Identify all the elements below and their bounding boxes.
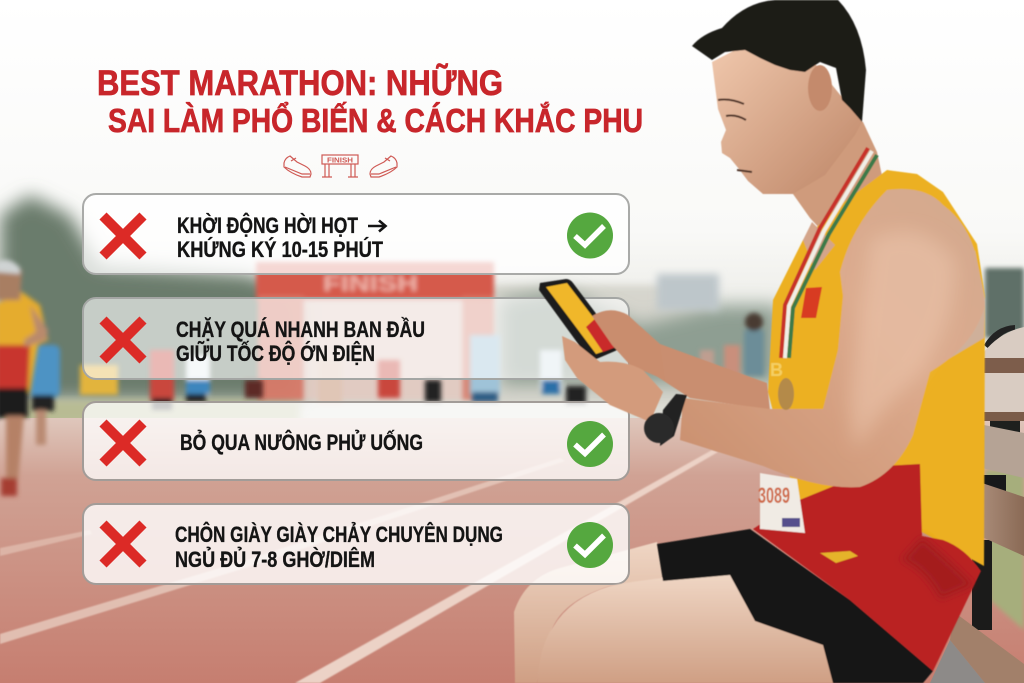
panel: hydration <box>83 402 629 480</box>
panel text: KHỜI ĐỘNG HỜI HỌT <box>177 213 358 238</box>
medal <box>778 378 794 410</box>
panel text: NGỦ ĐỦ 7-8 GHỜ/DIÊM <box>175 547 375 572</box>
runner seated on bench <box>537 0 985 683</box>
jersey chest lettering: B <box>770 360 783 380</box>
bib number <box>758 473 805 533</box>
panel: warm up <box>83 194 629 274</box>
icon: green check <box>567 522 613 568</box>
phone <box>539 279 622 360</box>
panel text: CHÔN GIÀY GIÀY CHẢY CHUYÊN DỤNG <box>175 522 503 547</box>
panel text <box>176 317 425 366</box>
tank top: red hem <box>753 464 981 671</box>
icon: green check <box>567 421 613 467</box>
hands <box>562 310 665 422</box>
shoulder and upper arm <box>680 189 985 487</box>
icon: left shoe <box>284 156 311 177</box>
medal ribbon <box>781 148 877 358</box>
smart watch <box>644 394 687 446</box>
icon: vietnam flag on jersey <box>801 287 822 318</box>
icon: green check <box>567 212 613 258</box>
background: foreground runner at left <box>0 260 48 496</box>
panel text: KHỨNG KÝ 10-15 PHÚT <box>177 237 383 262</box>
panel text: GIỮU TỐC ĐỘ ỚN ĐIỆN <box>176 340 375 366</box>
chest skin under the arm <box>930 250 985 370</box>
panel text: BỎ QUA NƯÔNG PHỬ UỐNG <box>180 429 423 455</box>
arm highlight <box>850 231 956 450</box>
rear forearm <box>640 326 770 410</box>
title: BEST MARATHON: NHỮNG <box>97 63 503 103</box>
bench <box>930 325 1024 683</box>
title: SAI LÀM PHỔ BIẾN & CÁCH KHẮC PHU <box>108 102 643 139</box>
background: blurred runners <box>30 313 764 445</box>
hair <box>692 0 866 122</box>
icon: right shoe <box>370 156 397 177</box>
rear thigh seen through the panels <box>514 542 665 683</box>
grass beyond the bench <box>985 470 1024 630</box>
icon: red cross <box>103 320 143 360</box>
tank top: neck opening skin <box>803 222 835 270</box>
thigh: front leg <box>537 575 833 683</box>
panel text <box>177 213 386 262</box>
panel: pacing <box>83 298 629 379</box>
background: blurred trees and buildings <box>0 195 1024 424</box>
ear <box>808 65 832 111</box>
neck <box>763 100 885 245</box>
shorts <box>657 529 933 683</box>
bib number: 3089 <box>758 483 790 508</box>
background: blurred finish gate: FINISH <box>323 271 418 296</box>
tank top: yellow <box>768 170 985 566</box>
head <box>712 45 862 194</box>
jersey star and folds <box>820 536 975 600</box>
background: hazy sky <box>0 0 1024 420</box>
title <box>97 63 643 139</box>
panel text: CHẶY QUÁ NHANH BAN ĐẦU <box>176 317 425 342</box>
icon: red cross <box>103 216 143 256</box>
icon: red cross <box>103 423 143 463</box>
panel: shoes and sleep <box>83 504 629 584</box>
icon row: shoes and finish gate <box>284 155 397 177</box>
background: running track <box>0 418 1024 683</box>
panel text <box>175 522 503 572</box>
background: blurred finish gate <box>256 262 494 400</box>
icon: finish gate: FINISH <box>327 156 353 164</box>
icon: red cross <box>103 524 143 564</box>
eyebrow, eye and mouth <box>718 100 752 172</box>
